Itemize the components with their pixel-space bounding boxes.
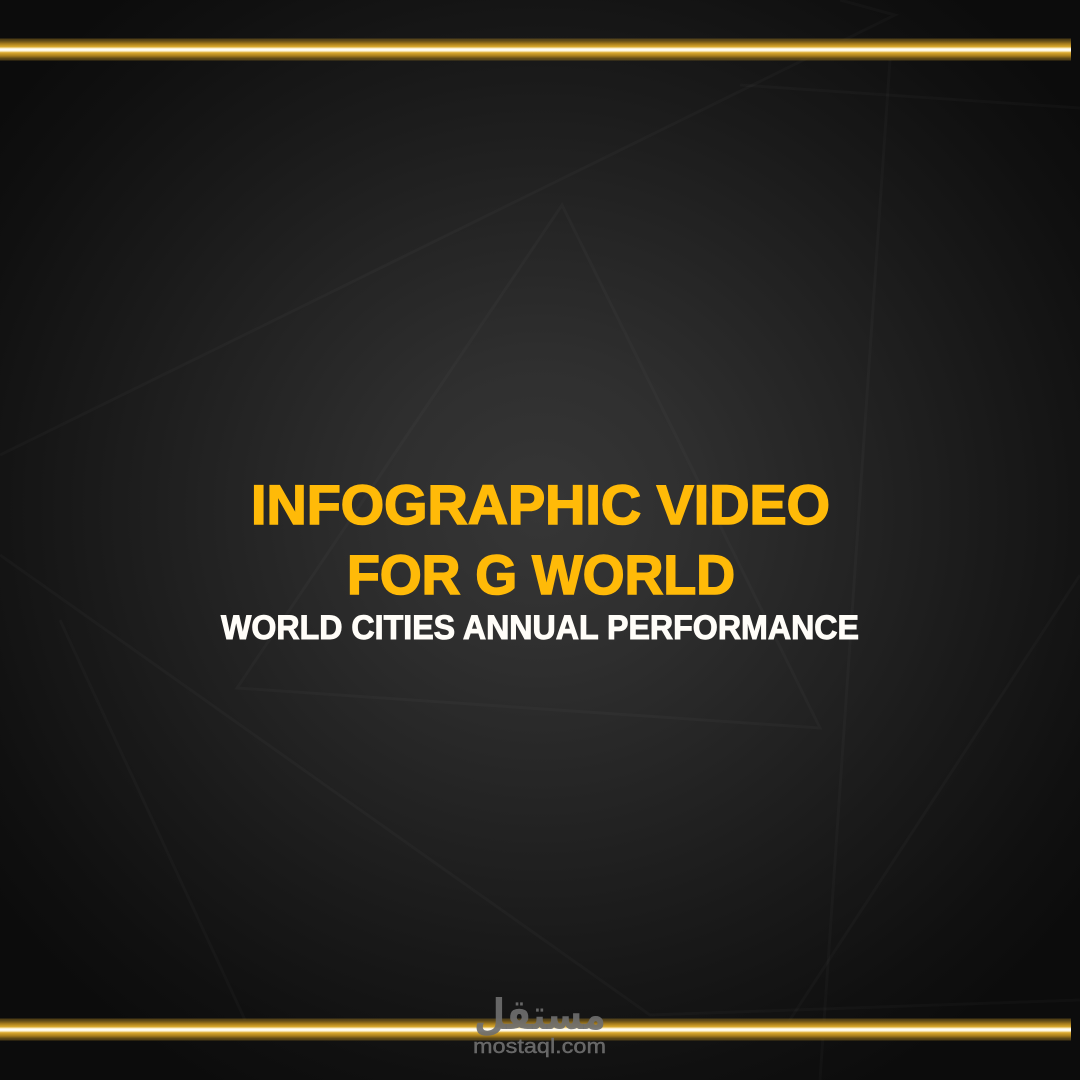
top glowing gold bar [0,38,1071,61]
watermark: mostaql logo: مستقل [474,990,606,1039]
watermark: mostaql logo: mostaql.com [473,1036,606,1058]
title [251,473,830,606]
bottom glowing gold bar [0,1018,1071,1041]
watermark: mostaql logo [473,990,606,1058]
subtitle: WORLD CITIES ANNUAL PERFORMANCE [221,609,859,647]
title: INFOGRAPHIC VIDEO [251,473,830,536]
title: FOR G WORLD [347,543,735,606]
